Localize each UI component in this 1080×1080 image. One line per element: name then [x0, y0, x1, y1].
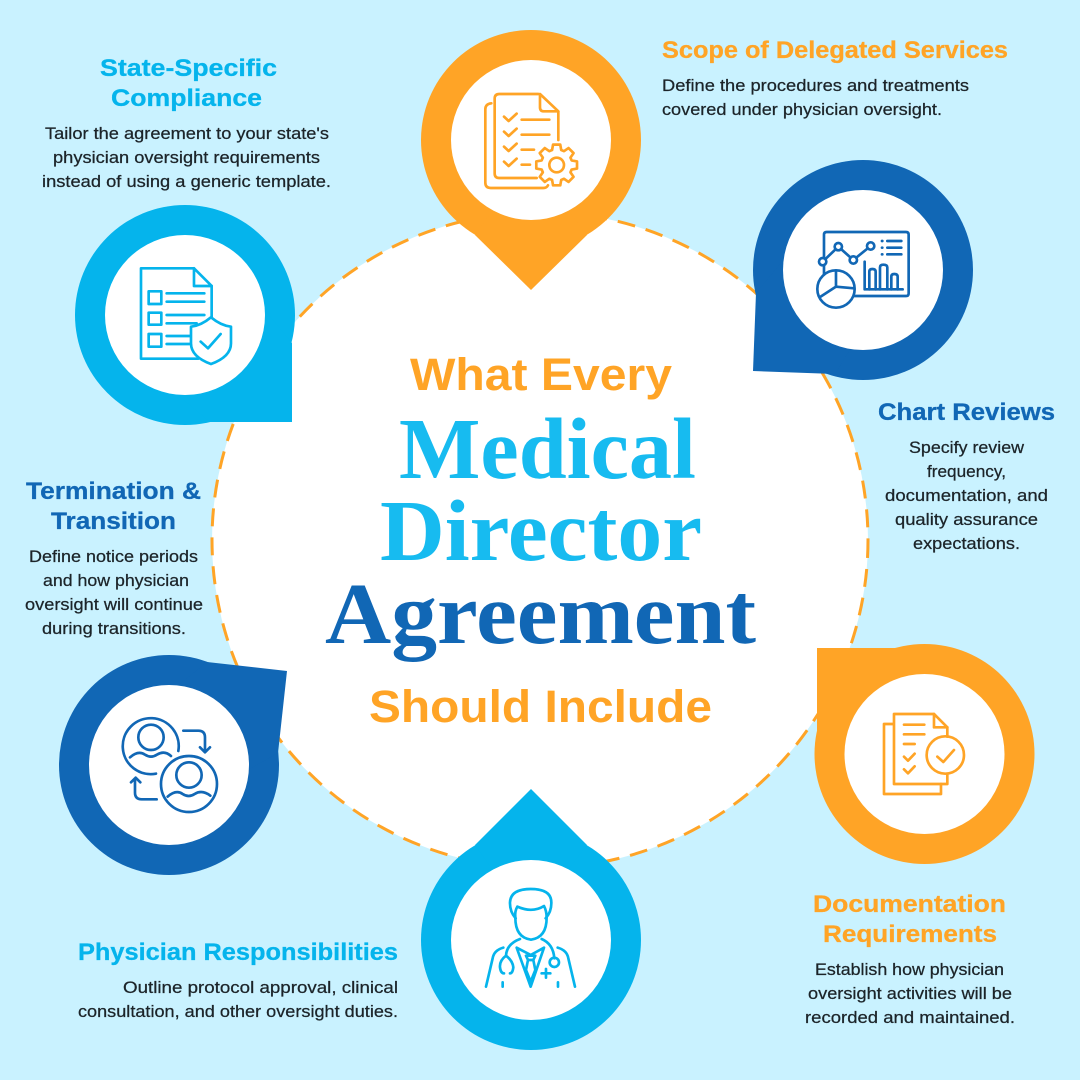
title: Should Include	[369, 681, 712, 732]
text: physician responsibilities: Physician Responsibilities	[78, 939, 398, 966]
text: termination and transition: oversight will continue	[25, 596, 203, 614]
text: chart reviews: Chart Reviews	[878, 399, 1055, 426]
text: termination and transition: during transitions.	[42, 620, 186, 638]
text: state-specific compliance: Tailor the agreement to your state's	[45, 125, 329, 143]
pin: state-specific compliance	[75, 205, 295, 425]
text: state-specific compliance: Compliance	[111, 85, 262, 112]
text: state-specific compliance: State-Specific	[100, 55, 277, 82]
text: termination and transition: Define notice periods	[29, 548, 198, 566]
text: scope of delegated services: Define the procedures and treatments	[662, 77, 969, 95]
text: termination and transition: Termination &	[26, 478, 201, 505]
text: documentation requirements: Documentation	[813, 891, 1006, 918]
text: chart reviews: expectations.	[913, 535, 1020, 553]
icon: two people swapping	[123, 718, 217, 812]
icon: documents with check	[884, 714, 964, 794]
text: termination and transition	[25, 478, 203, 638]
text: chart reviews: quality assurance	[895, 511, 1038, 529]
text: termination and transition: Transition	[51, 508, 176, 535]
text: chart reviews: frequency,	[927, 463, 1006, 481]
text: documentation requirements: recorded and maintained.	[805, 1009, 1015, 1027]
text: documentation requirements: Requirements	[823, 921, 997, 948]
title: Agreement	[325, 565, 756, 662]
text: state-specific compliance: instead of using a generic template.	[42, 173, 331, 191]
text: physician responsibilities	[78, 939, 398, 1021]
icon: dashboard charts	[817, 232, 909, 308]
pin: scope of delegated services	[421, 30, 641, 290]
text: documentation requirements	[805, 891, 1015, 1027]
text: chart reviews: documentation, and	[885, 487, 1048, 505]
title: Director	[380, 482, 702, 579]
icon: document with shield	[141, 268, 231, 364]
text: physician responsibilities: consultation, and other oversight duties.	[78, 1003, 398, 1021]
text: chart reviews	[878, 399, 1055, 553]
text: scope of delegated services: Scope of Delegated Services	[662, 37, 1008, 64]
central white circle with dashed ring	[212, 212, 868, 868]
pin: termination and transition	[59, 655, 287, 875]
text: chart reviews: Specify review	[909, 439, 1024, 457]
icon: checklist with gear	[485, 94, 577, 188]
text: documentation requirements: Establish how physician	[815, 961, 1004, 979]
pin: chart reviews	[753, 160, 973, 380]
pin: physician responsibilities	[421, 789, 641, 1050]
text: state-specific compliance	[42, 55, 331, 191]
text: termination and transition: and how physician	[43, 572, 189, 590]
pin: documentation requirements	[814, 644, 1034, 864]
title: Medical	[399, 400, 696, 497]
icon: doctor	[486, 889, 575, 987]
text: physician responsibilities: Outline protocol approval, clinical	[123, 979, 398, 997]
text: scope of delegated services: covered under physician oversight.	[662, 101, 942, 119]
text: documentation requirements: oversight activities will be	[808, 985, 1012, 1003]
title: What Every	[410, 349, 672, 400]
text: scope of delegated services	[662, 37, 1008, 119]
text: state-specific compliance: physician oversight requirements	[53, 149, 320, 167]
title	[325, 349, 756, 732]
